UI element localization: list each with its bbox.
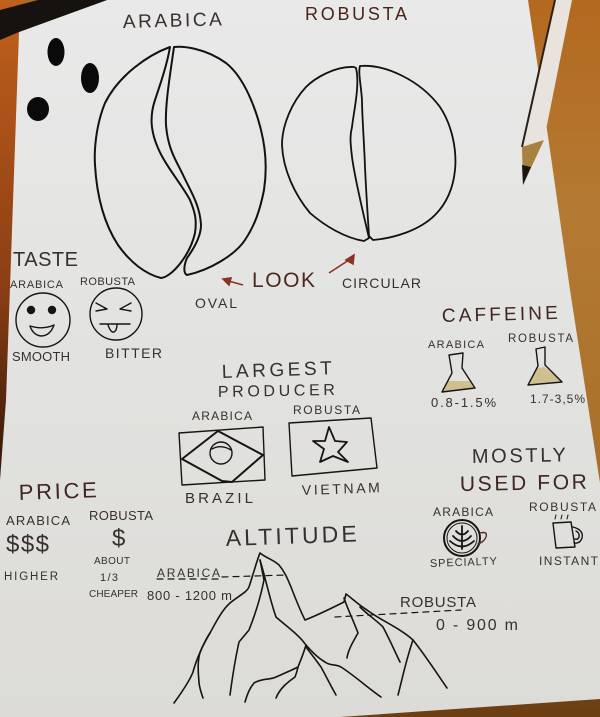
used for arabica label: ARABICA	[433, 505, 493, 519]
section: caffeine	[428, 303, 585, 410]
bitter label: BITTER	[105, 345, 162, 361]
specialty label: SPECIALTY	[430, 556, 498, 570]
section: look	[195, 255, 421, 311]
brazil label: BRAZIL	[185, 490, 253, 507]
three black coffee beans	[27, 38, 99, 121]
producer heading: PRODUCER	[218, 382, 335, 401]
about one third cheaper	[89, 556, 138, 600]
section: largest producer	[179, 358, 380, 507]
producer robusta label: ROBUSTA	[293, 403, 360, 417]
robusta altitude label: ROBUSTA	[400, 594, 476, 611]
icon: robusta flask	[528, 347, 562, 385]
vietnam label: VIETNAM	[302, 479, 380, 498]
pencil top right	[522, 0, 572, 185]
instant label: INSTANT	[539, 554, 599, 568]
section: altitude	[147, 520, 518, 703]
look label: LOOK	[252, 269, 315, 292]
arrow to circular	[329, 255, 354, 273]
taste robusta label: ROBUSTA	[80, 276, 136, 288]
arabica altitude range: 800 - 1200 m	[147, 588, 232, 603]
taste arabica label: ARABICA	[10, 279, 64, 291]
used for heading: USED FOR	[460, 471, 587, 496]
dashed altitude guide lines	[157, 575, 461, 617]
icon: flag of Brazil	[179, 427, 265, 485]
arabica caffeine value: 0.8-1.5%	[431, 395, 496, 410]
taste heading: TASTE	[13, 249, 78, 271]
mountain drawing	[174, 553, 447, 703]
about one third cheaper: 1/3	[100, 572, 118, 584]
largest heading: LARGEST	[221, 358, 332, 383]
section: price	[4, 477, 153, 600]
circular label: CIRCULAR	[342, 275, 421, 291]
producer arabica label: ARABICA	[192, 409, 252, 423]
about one third cheaper: CHEAPER	[89, 589, 138, 600]
higher label: HIGHER	[4, 571, 58, 583]
about one third cheaper: ABOUT	[94, 556, 130, 567]
mostly heading: MOSTLY	[472, 444, 566, 468]
section: taste	[10, 249, 162, 364]
black pencil top left	[0, 0, 107, 40]
arrow to oval	[223, 278, 243, 285]
used for robusta label: ROBUSTA	[529, 500, 596, 514]
heading: Robusta: ROBUSTA	[305, 4, 407, 24]
icon: flag of Vietnam	[289, 418, 377, 476]
three dollar signs: $$$	[6, 531, 49, 558]
altitude heading: ALTITUDE	[225, 520, 357, 551]
icon: grimacing face	[90, 288, 142, 340]
arabica bean drawing	[95, 47, 266, 278]
caffeine robusta label: ROBUSTA	[508, 333, 573, 345]
robusta bean drawing	[282, 66, 455, 241]
icon: smiling face	[16, 293, 70, 347]
price robusta label: ROBUSTA	[89, 508, 153, 523]
smooth label: SMOOTH	[12, 349, 70, 364]
icon: latte art cup	[444, 520, 486, 556]
arabica altitude label: ARABICA	[157, 566, 220, 580]
price arabica label: ARABICA	[6, 513, 70, 528]
robusta altitude range: 0 - 900 m	[436, 617, 518, 634]
price heading: PRICE	[18, 477, 97, 505]
caffeine arabica label: ARABICA	[428, 339, 485, 351]
section: mostly used for	[430, 444, 599, 570]
icon: instant mug	[553, 515, 582, 548]
robusta caffeine value: 1.7-3,5%	[530, 392, 585, 406]
one dollar sign: $	[112, 525, 125, 552]
caffeine heading: CAFFEINE	[442, 303, 558, 327]
oval label: OVAL	[195, 295, 237, 311]
heading: Arabica: ARABICA	[123, 9, 222, 33]
icon: arabica flask	[442, 353, 475, 392]
